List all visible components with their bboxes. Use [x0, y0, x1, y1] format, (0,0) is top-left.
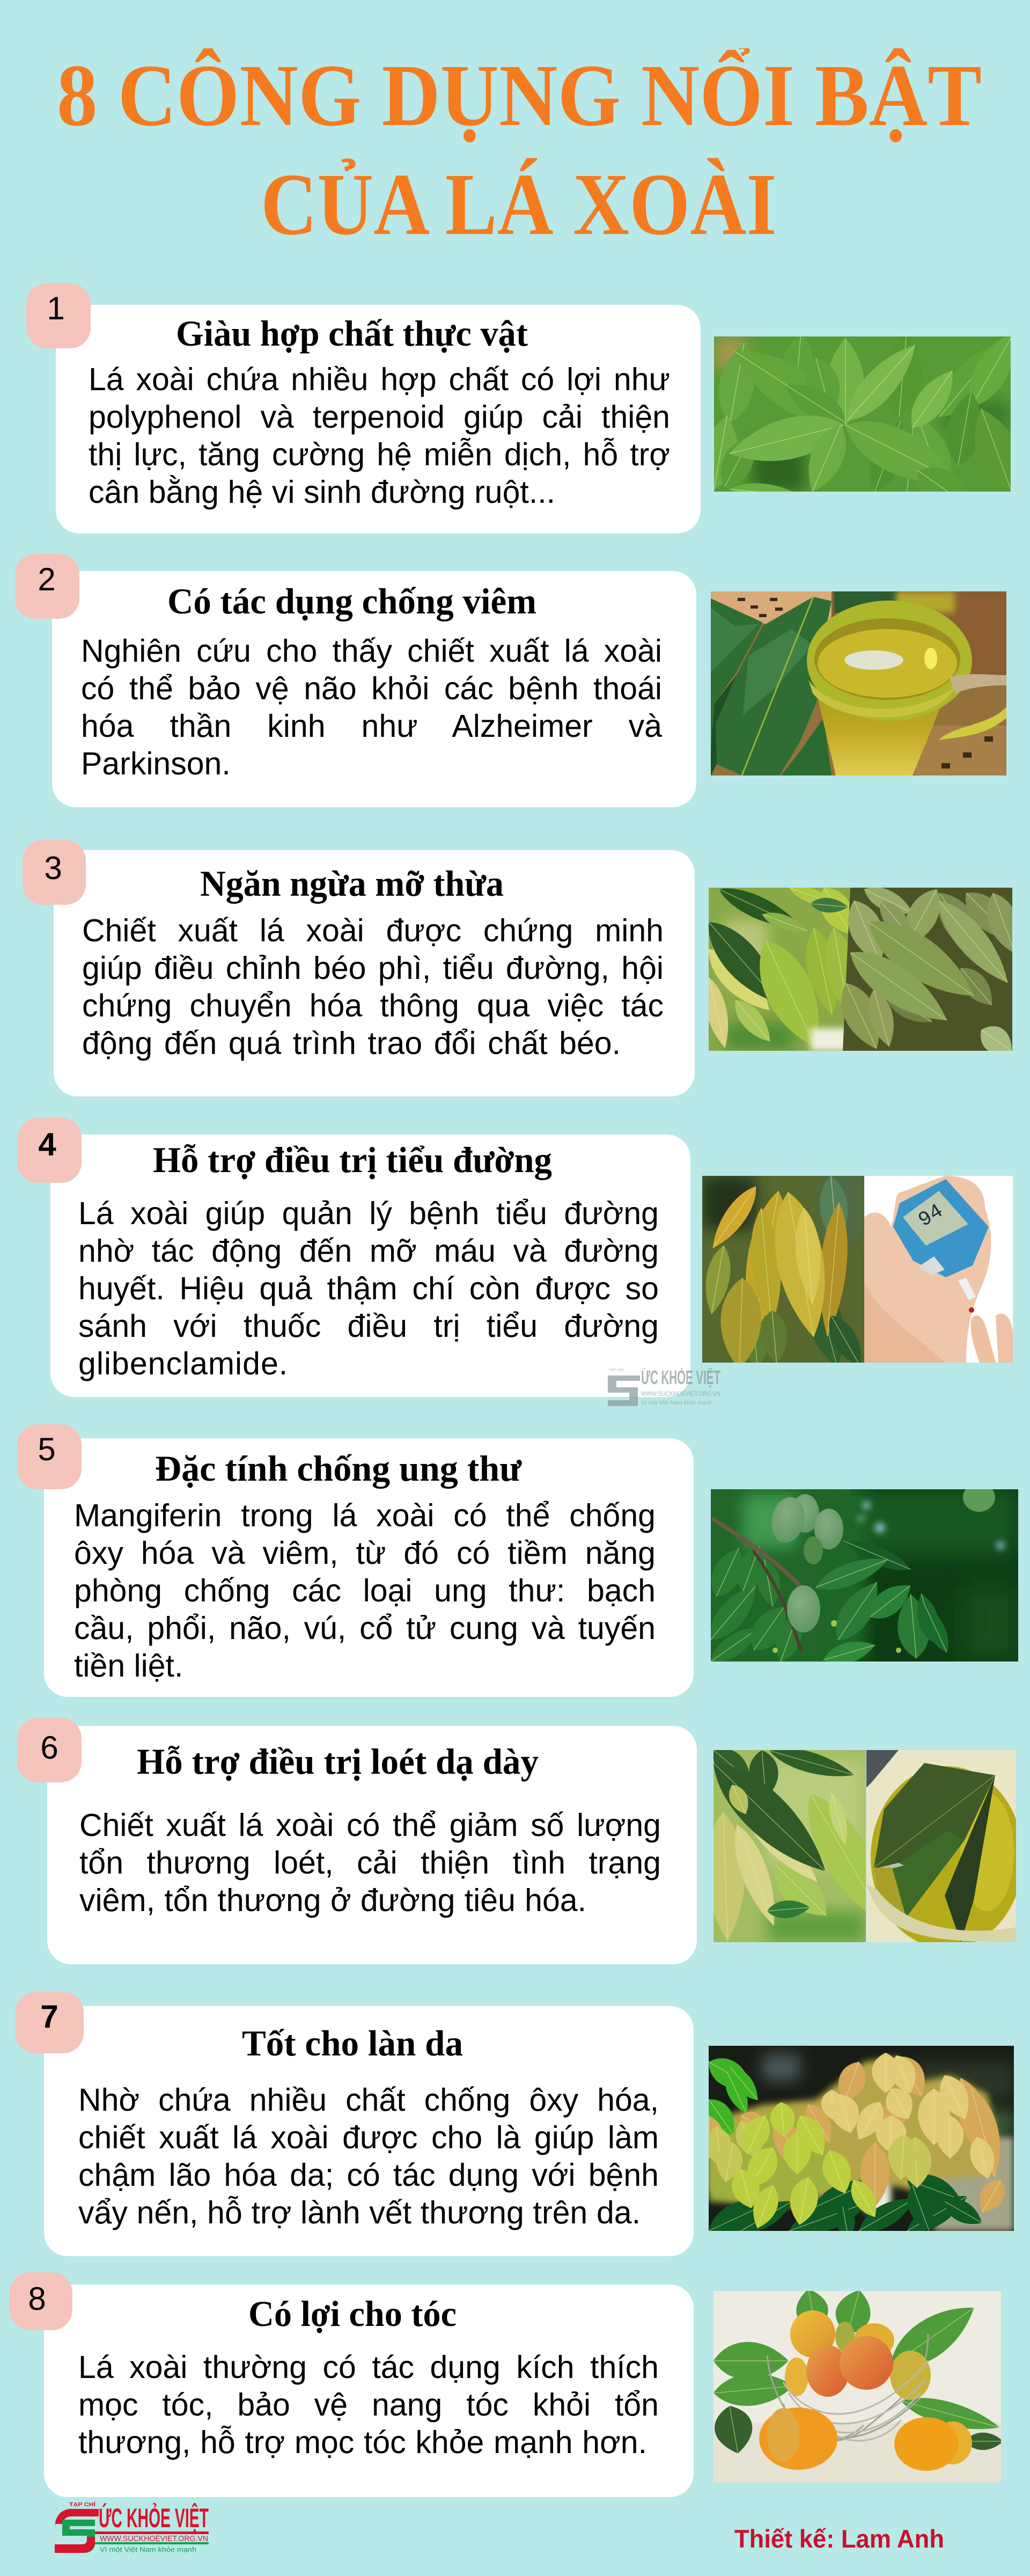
- text block 8: [78, 2350, 659, 2460]
- text block 3: giúp điều chỉnh béo phì, tiểu đường, hội: [82, 950, 664, 986]
- panel: benefit 2 card: [52, 571, 696, 807]
- icon: photo of mangoes in wire basket: [713, 2291, 1001, 2483]
- icon: photo of yellow-green mango plant: [709, 2046, 1014, 2231]
- text block 4: glibenclamide.: [78, 1346, 288, 1381]
- text block 6: viêm, tổn thương ở đường tiêu hóa.: [79, 1883, 586, 1918]
- text block 3: động đến quá trình trao đổi chất béo.: [82, 1026, 621, 1061]
- text block 2: hóa thần kinh như Alzheimer và: [81, 708, 662, 744]
- text block 7: vẩy nến, hỗ trợ lành vết thương trên da.: [78, 2195, 641, 2230]
- text block 6: Chiết xuất lá xoài có thể giảm số lượng: [79, 1807, 661, 1843]
- text block 4: huyết. Hiệu quả thậm chí còn được so: [78, 1271, 659, 1306]
- number 3: 3: [44, 850, 62, 886]
- panel: benefit 7 card: [44, 2006, 694, 2256]
- icon: Sức Khỏe Việt logo: [55, 2501, 209, 2553]
- meter reading: 94: [915, 1200, 947, 1232]
- panel: benefit 5 card: [44, 1438, 694, 1697]
- icon: faded magazine watermark: [608, 1368, 720, 1406]
- heading 5: Đặc tính chống ung thư: [155, 1448, 522, 1489]
- text block 4: sánh với thuốc điều trị tiểu đường: [78, 1308, 659, 1344]
- panel: benefit 8 card: [44, 2285, 694, 2497]
- text block 1: cân bằng hệ vi sinh đường ruột...: [89, 474, 555, 510]
- number 8: 8: [28, 2281, 46, 2317]
- badge 3: [23, 840, 86, 905]
- logo small caption: TẠP CHÍ: [69, 2501, 95, 2508]
- text block 7: Nhờ chứa nhiều chất chống ôxy hóa,: [78, 2082, 659, 2118]
- text block 1: thị lực, tăng cường hệ miễn dịch, hỗ trợ: [89, 437, 670, 472]
- heading 6: Hỗ trợ điều trị loét dạ dày: [137, 1741, 539, 1782]
- text block 5: ôxy hóa và viêm, từ đó có tiềm năng: [74, 1535, 656, 1571]
- text block 3: [82, 913, 664, 1061]
- text block 1: Lá xoài chứa nhiều hợp chất có lợi như: [89, 362, 670, 397]
- number 1: 1: [47, 290, 65, 326]
- text block 5: cầu, phổi, não, vú, cổ tử cung và tuyến: [74, 1611, 656, 1646]
- text block 5: Mangiferin trong lá xoài có thể chống: [74, 1498, 656, 1533]
- icon: photo of green and yellow leaves: [713, 1750, 866, 1942]
- badge 4: [17, 1118, 82, 1183]
- badge 2: [15, 554, 79, 619]
- heading 1: Giàu hợp chất thực vật: [176, 313, 528, 354]
- text block 6: tổn thương loét, cải thiện tình trạng: [79, 1845, 661, 1880]
- icon: faded magazine watermark: TẠP CHÍ: [609, 1368, 624, 1372]
- number 6: 6: [40, 1730, 58, 1766]
- panel: benefit 4 card: [50, 1135, 690, 1397]
- number 5: 5: [38, 1431, 56, 1467]
- text block 5: phòng chống các loại ung thư: bạch: [74, 1573, 656, 1608]
- badge 5: [17, 1424, 82, 1489]
- panel: benefit 1 card: [56, 305, 701, 533]
- heading 8: Có lợi cho tóc: [248, 2293, 457, 2334]
- heading 3: Ngăn ngừa mỡ thừa: [200, 863, 504, 904]
- badge 6: [17, 1718, 82, 1782]
- title: CỦA LÁ XOÀI: [261, 155, 777, 253]
- icon: photo of leaves and cup of tea: [711, 591, 1006, 775]
- icon: photo of leaves in a bowl of tea: [866, 1750, 1016, 1942]
- text block 1: [89, 362, 670, 510]
- number 4: 4: [38, 1126, 56, 1162]
- logo tagline: Vì một Việt Nam khỏe mạnh: [100, 2545, 196, 2553]
- text block 2: Parkinson.: [81, 746, 231, 781]
- text block 3: Chiết xuất lá xoài được chứng minh: [82, 913, 664, 948]
- text block 4: nhờ tác động đến mỡ máu và đường: [78, 1233, 659, 1269]
- title: [57, 48, 982, 253]
- text block 4: Lá xoài giúp quản lý bệnh tiểu đường: [78, 1196, 659, 1231]
- icon: photo of mango leaves: [714, 336, 1011, 492]
- badge 7: [15, 1992, 84, 2053]
- number 7: 7: [40, 1999, 58, 2035]
- text block 2: Nghiên cứu cho thấy chiết xuất lá xoài: [81, 633, 662, 669]
- panel: benefit 3 card: [54, 850, 695, 1096]
- badge 1: [26, 283, 91, 348]
- heading 7: Tốt cho làn da: [242, 2023, 463, 2063]
- heading 2: Có tác dụng chống viêm: [167, 581, 536, 621]
- heading 4: Hỗ trợ điều trị tiểu đường: [153, 1139, 552, 1180]
- text block 6: [79, 1807, 661, 1918]
- text block 8: thương, hỗ trợ mọc tóc khỏe mạnh hơn.: [78, 2425, 647, 2460]
- number 2: 2: [38, 561, 56, 597]
- text block 2: [81, 633, 662, 781]
- badge 8: [10, 2272, 72, 2330]
- designer credit: Thiết kế: Lam Anh: [734, 2524, 944, 2553]
- text block 7: [78, 2082, 659, 2230]
- text block 5: tiền liệt.: [74, 1648, 183, 1684]
- icon: photo of yellow mango leaves: [702, 1176, 864, 1363]
- text block 7: chậm lão hóa da; có tác dụng với bệnh: [78, 2157, 659, 2193]
- text block 1: polyphenol và terpenoid giúp cải thiện: [89, 399, 670, 435]
- text block 5: [74, 1498, 656, 1684]
- icon: photo of glucose meter in hand: [864, 1176, 1013, 1363]
- icon: photo of green mangoes on tree: [711, 1489, 1018, 1662]
- icon: faded magazine watermark: Vì một Việt Nam khỏe mạnh: [641, 1400, 712, 1406]
- text block 8: mọc tóc, bảo vệ nang tóc khỏi tổn: [78, 2387, 659, 2423]
- text block 2: có thể bảo vệ não khỏi các bệnh thoái: [81, 671, 662, 706]
- text block 3: chứng chuyển hóa thông qua việc tác: [82, 988, 664, 1023]
- icon: photo of fresh and dried leaves: [709, 888, 1012, 1051]
- panel: benefit 6 card: [47, 1726, 697, 1964]
- text block 7: chiết xuất lá xoài được cho là giúp làm: [78, 2120, 659, 2155]
- text block 4: [78, 1196, 659, 1381]
- text block 8: Lá xoài thường có tác dụng kích thích: [78, 2350, 659, 2385]
